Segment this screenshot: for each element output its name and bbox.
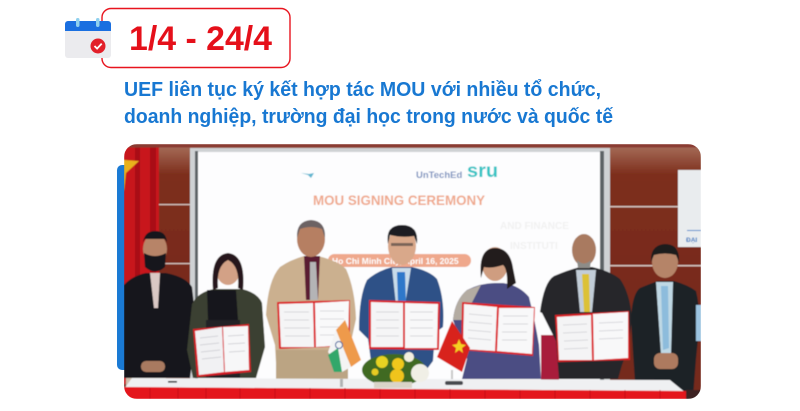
date badge <box>102 8 290 68</box>
screen logos: UnTechEd <box>416 170 462 181</box>
person 5 <box>453 247 541 379</box>
wall sign: ĐẠI <box>686 237 697 244</box>
flag: India <box>328 320 361 372</box>
screen logos: sru <box>467 161 498 182</box>
heading: doanh nghiệp, trường đại học trong nước và quốc tế <box>124 105 614 128</box>
table <box>124 378 701 399</box>
flowers <box>362 352 429 388</box>
red chair <box>541 335 559 380</box>
date pill <box>328 254 471 267</box>
document 4 <box>369 300 440 350</box>
projection screen: AND FINANCE <box>500 221 569 232</box>
document 6 <box>555 311 630 362</box>
person 7 <box>631 244 699 397</box>
person at right edge <box>696 305 701 341</box>
person 3 <box>266 220 356 380</box>
person 6 <box>540 234 632 379</box>
document 3 <box>277 300 350 349</box>
red curtain <box>124 144 159 384</box>
photo: MOU signing ceremony <box>124 144 701 399</box>
wood wall <box>124 144 701 399</box>
projection screen: INSTITUTI <box>510 241 558 252</box>
heading: UEF liên tục ký kết hợp tác MOU với nhiều tổ chức, <box>124 78 601 101</box>
flag: Vietnam <box>437 321 470 382</box>
document 5 <box>461 302 535 356</box>
icon: calendar <box>65 18 111 58</box>
screen logos <box>302 166 498 178</box>
person 4 <box>359 225 443 369</box>
projection screen <box>124 144 701 388</box>
wall sign <box>678 170 701 247</box>
blue accent bar <box>117 165 131 370</box>
person 1 <box>124 231 195 386</box>
document 2 <box>193 324 251 377</box>
date pill: Ho Chi Minh City, April 16, 2025 <box>332 256 459 266</box>
date text: 1/4 - 24/4 <box>129 20 272 58</box>
screen title: MOU SIGNING CEREMONY <box>313 192 486 208</box>
person 2 <box>187 253 265 378</box>
heading <box>124 78 614 128</box>
